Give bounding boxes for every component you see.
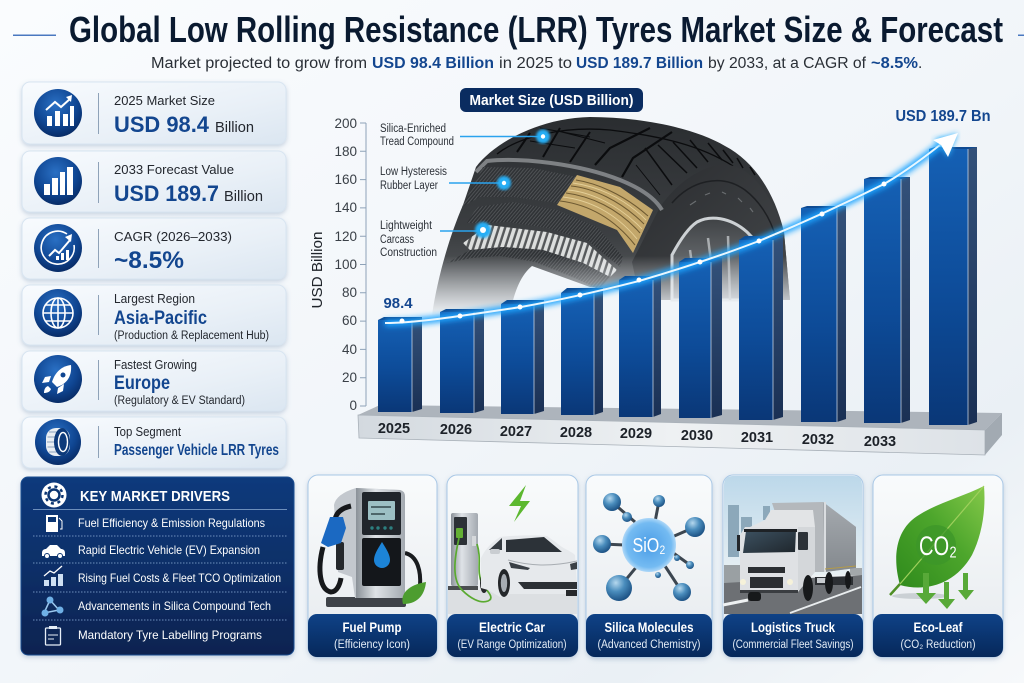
- year labels: 2032: [802, 432, 834, 448]
- callout: carcass: Lightweight: [380, 220, 433, 232]
- subtitle: USD 189.7 Billion: [576, 55, 703, 72]
- panel: top segment: Top Segment: [114, 425, 181, 439]
- lower band: [447, 247, 610, 290]
- bar 2028: [561, 288, 603, 415]
- icon: silica molecule illustration: SiO₂: [632, 535, 666, 557]
- growth arrow: [385, 133, 958, 324]
- card: electric car: (EV Range Optimization): [458, 639, 567, 651]
- low hysteresis layer: [462, 167, 577, 207]
- driver: EV expansion: Rapid Electric Vehicle (EV) Expansion: [78, 543, 260, 557]
- subtitle: ~8.5%: [871, 55, 918, 72]
- icon: fuel pump illustration: [320, 488, 426, 607]
- icon: tyre: [35, 419, 81, 465]
- year labels: 2030: [681, 428, 713, 444]
- panel: fastest growing: (Regulatory & EV Standard): [114, 395, 245, 407]
- bar 2027: [501, 300, 544, 414]
- icon: gear: [42, 482, 66, 508]
- year labels: 2025: [378, 421, 410, 437]
- bar chart: [378, 147, 977, 425]
- y axis: 40: [342, 342, 357, 357]
- card: logistics truck: Logistics Truck: [751, 620, 835, 635]
- tyre cutaway: [432, 117, 790, 315]
- textured band: [467, 202, 623, 267]
- bar 2025: [378, 317, 422, 412]
- driver: fuel efficiency: [46, 515, 265, 532]
- y axis: 140: [334, 200, 357, 215]
- panel: fastest growing: [22, 351, 286, 411]
- y axis: 80: [342, 285, 357, 300]
- y axis: 20: [342, 370, 357, 385]
- panel: top segment: [22, 417, 286, 468]
- panel: largest region: (Production & Replacement Hub): [114, 330, 269, 342]
- icon: truck illustration: [723, 476, 862, 614]
- card: fuel pump: (Efficiency Icon): [334, 639, 410, 651]
- callout: rubber layer: [380, 166, 511, 192]
- y axis: USD Billion: [310, 232, 326, 308]
- panel: 2033 forecast value: Billion: [224, 189, 263, 205]
- callout: rubber layer: Low Hysteresis: [380, 166, 447, 178]
- panel: 2025 market size: [22, 82, 286, 144]
- icon: rising bars: [34, 89, 82, 137]
- bar 2026: [440, 309, 484, 413]
- y axis: [310, 116, 366, 413]
- panel: 2025 market size: Billion: [215, 120, 254, 136]
- driver: tyre labelling: [46, 626, 262, 645]
- gold cord layer: [557, 175, 653, 253]
- chart heading: [460, 88, 643, 112]
- driver: fuel efficiency: Fuel Efficiency & Emission Regulations: [78, 516, 265, 530]
- bar 2032: [801, 206, 846, 422]
- panel: 2025 market size: 2025 Market Size: [114, 93, 215, 108]
- icon: silica molecule illustration: [593, 493, 705, 601]
- panel: 2033 forecast value: [22, 151, 286, 212]
- panel: fastest growing: Europe: [114, 373, 170, 394]
- value label 2025: 98.4: [384, 295, 413, 312]
- subtitle: [151, 55, 922, 72]
- card: fuel pump: Fuel Pump: [342, 620, 402, 635]
- year labels: 2027: [500, 424, 532, 440]
- value label 2033: USD 189.7 Bn: [896, 108, 990, 125]
- panel: fastest growing: Fastest Growing: [114, 358, 197, 372]
- chart base platform: [358, 405, 1002, 455]
- subtitle: in 2025 to: [499, 55, 572, 72]
- callout: tread compound: [380, 123, 550, 148]
- tyre callouts: [380, 123, 550, 259]
- panel: largest region: [22, 285, 286, 345]
- icon: globe: [34, 289, 82, 337]
- year labels: 2028: [560, 425, 592, 441]
- card: silica molecules: Silica Molecules: [604, 620, 694, 635]
- y axis: 0: [349, 398, 357, 413]
- callout: carcass: [380, 220, 491, 259]
- icon: leaf illustration: CO₂: [919, 531, 957, 561]
- icon: electric car illustration: [448, 485, 577, 614]
- bar 2033: [864, 177, 910, 423]
- callout: carcass: Carcass: [380, 234, 414, 246]
- panel: CAGR: ~8.5%: [114, 247, 184, 274]
- panel: largest region: Largest Region: [114, 292, 195, 306]
- subtitle: by 2033, at a CAGR of: [708, 55, 867, 72]
- year labels: [378, 421, 896, 450]
- bar final: [929, 147, 977, 425]
- wheel rim: [670, 216, 753, 302]
- panel: 2033 forecast value: 2033 Forecast Value: [114, 162, 234, 177]
- panel: 2025 market size: USD 98.4: [114, 112, 210, 137]
- icon: rocket: [34, 355, 82, 403]
- year labels: 2026: [440, 422, 472, 438]
- subtitle: USD 98.4 Billion: [372, 55, 494, 72]
- card: electric car: Electric Car: [479, 620, 546, 635]
- tread grooves: [497, 128, 755, 195]
- panel: key market drivers: KEY MARKET DRIVERS: [80, 488, 230, 505]
- callout: tread compound: Silica-Enriched: [380, 123, 446, 135]
- bar 2029: [619, 276, 661, 417]
- grey cap band: [476, 160, 662, 210]
- subtitle: .: [918, 55, 922, 72]
- panel: key market drivers: [21, 477, 294, 655]
- card: silica molecules: [586, 475, 712, 657]
- card: eco leaf: (CO₂ Reduction): [900, 639, 976, 651]
- chart heading: Market Size (USD Billion): [470, 92, 634, 109]
- callout: tread compound: Tread Compound: [380, 136, 454, 148]
- y axis: 100: [334, 257, 357, 272]
- card: fuel pump: [308, 475, 437, 657]
- y axis: 60: [342, 313, 357, 328]
- card: logistics truck: [723, 475, 863, 657]
- driver: tyre labelling: Mandatory Tyre Labelling Programs: [78, 628, 262, 642]
- driver: fuel costs: Rising Fuel Costs & Fleet TCO Optimization: [78, 571, 281, 585]
- driver: silica tech: [42, 596, 271, 616]
- year labels: 2029: [620, 426, 652, 442]
- panel: largest region: Asia-Pacific: [114, 308, 207, 329]
- year labels: 2033: [864, 434, 896, 450]
- y axis: 180: [334, 144, 357, 159]
- callout: rubber layer: Rubber Layer: [380, 180, 438, 192]
- driver: silica tech: Advancements in Silica Compound Tech: [78, 599, 271, 613]
- sidewall: [632, 164, 790, 300]
- icon: bar chart: [34, 157, 82, 205]
- icon: leaf illustration: [890, 486, 984, 609]
- bar 2031: [739, 236, 783, 420]
- card: logistics truck: (Commercial Fleet Savings): [732, 639, 854, 651]
- card: eco leaf: [873, 475, 1003, 657]
- y axis: 160: [334, 172, 357, 187]
- white ribs: [463, 225, 617, 277]
- y axis: 200: [334, 116, 357, 131]
- panel: top segment: Passenger Vehicle LRR Tyres: [114, 442, 279, 459]
- icon: circular growth arrow: [34, 224, 82, 272]
- card: eco leaf: Eco-Leaf: [914, 620, 963, 635]
- driver: fuel costs: [44, 566, 281, 586]
- panel: 2033 forecast value: USD 189.7: [114, 181, 219, 206]
- driver: EV expansion: [42, 543, 260, 558]
- bar 2030: [679, 258, 722, 418]
- callout: carcass: Construction: [380, 247, 437, 259]
- card: silica molecules: (Advanced Chemistry): [598, 639, 701, 651]
- panel: CAGR: CAGR (2026–2033): [114, 229, 232, 244]
- card: electric car: [447, 475, 578, 657]
- subtitle: Market projected to grow from: [151, 55, 367, 72]
- y axis: 120: [334, 229, 357, 244]
- panel: CAGR: [22, 218, 286, 279]
- year labels: 2031: [741, 430, 773, 446]
